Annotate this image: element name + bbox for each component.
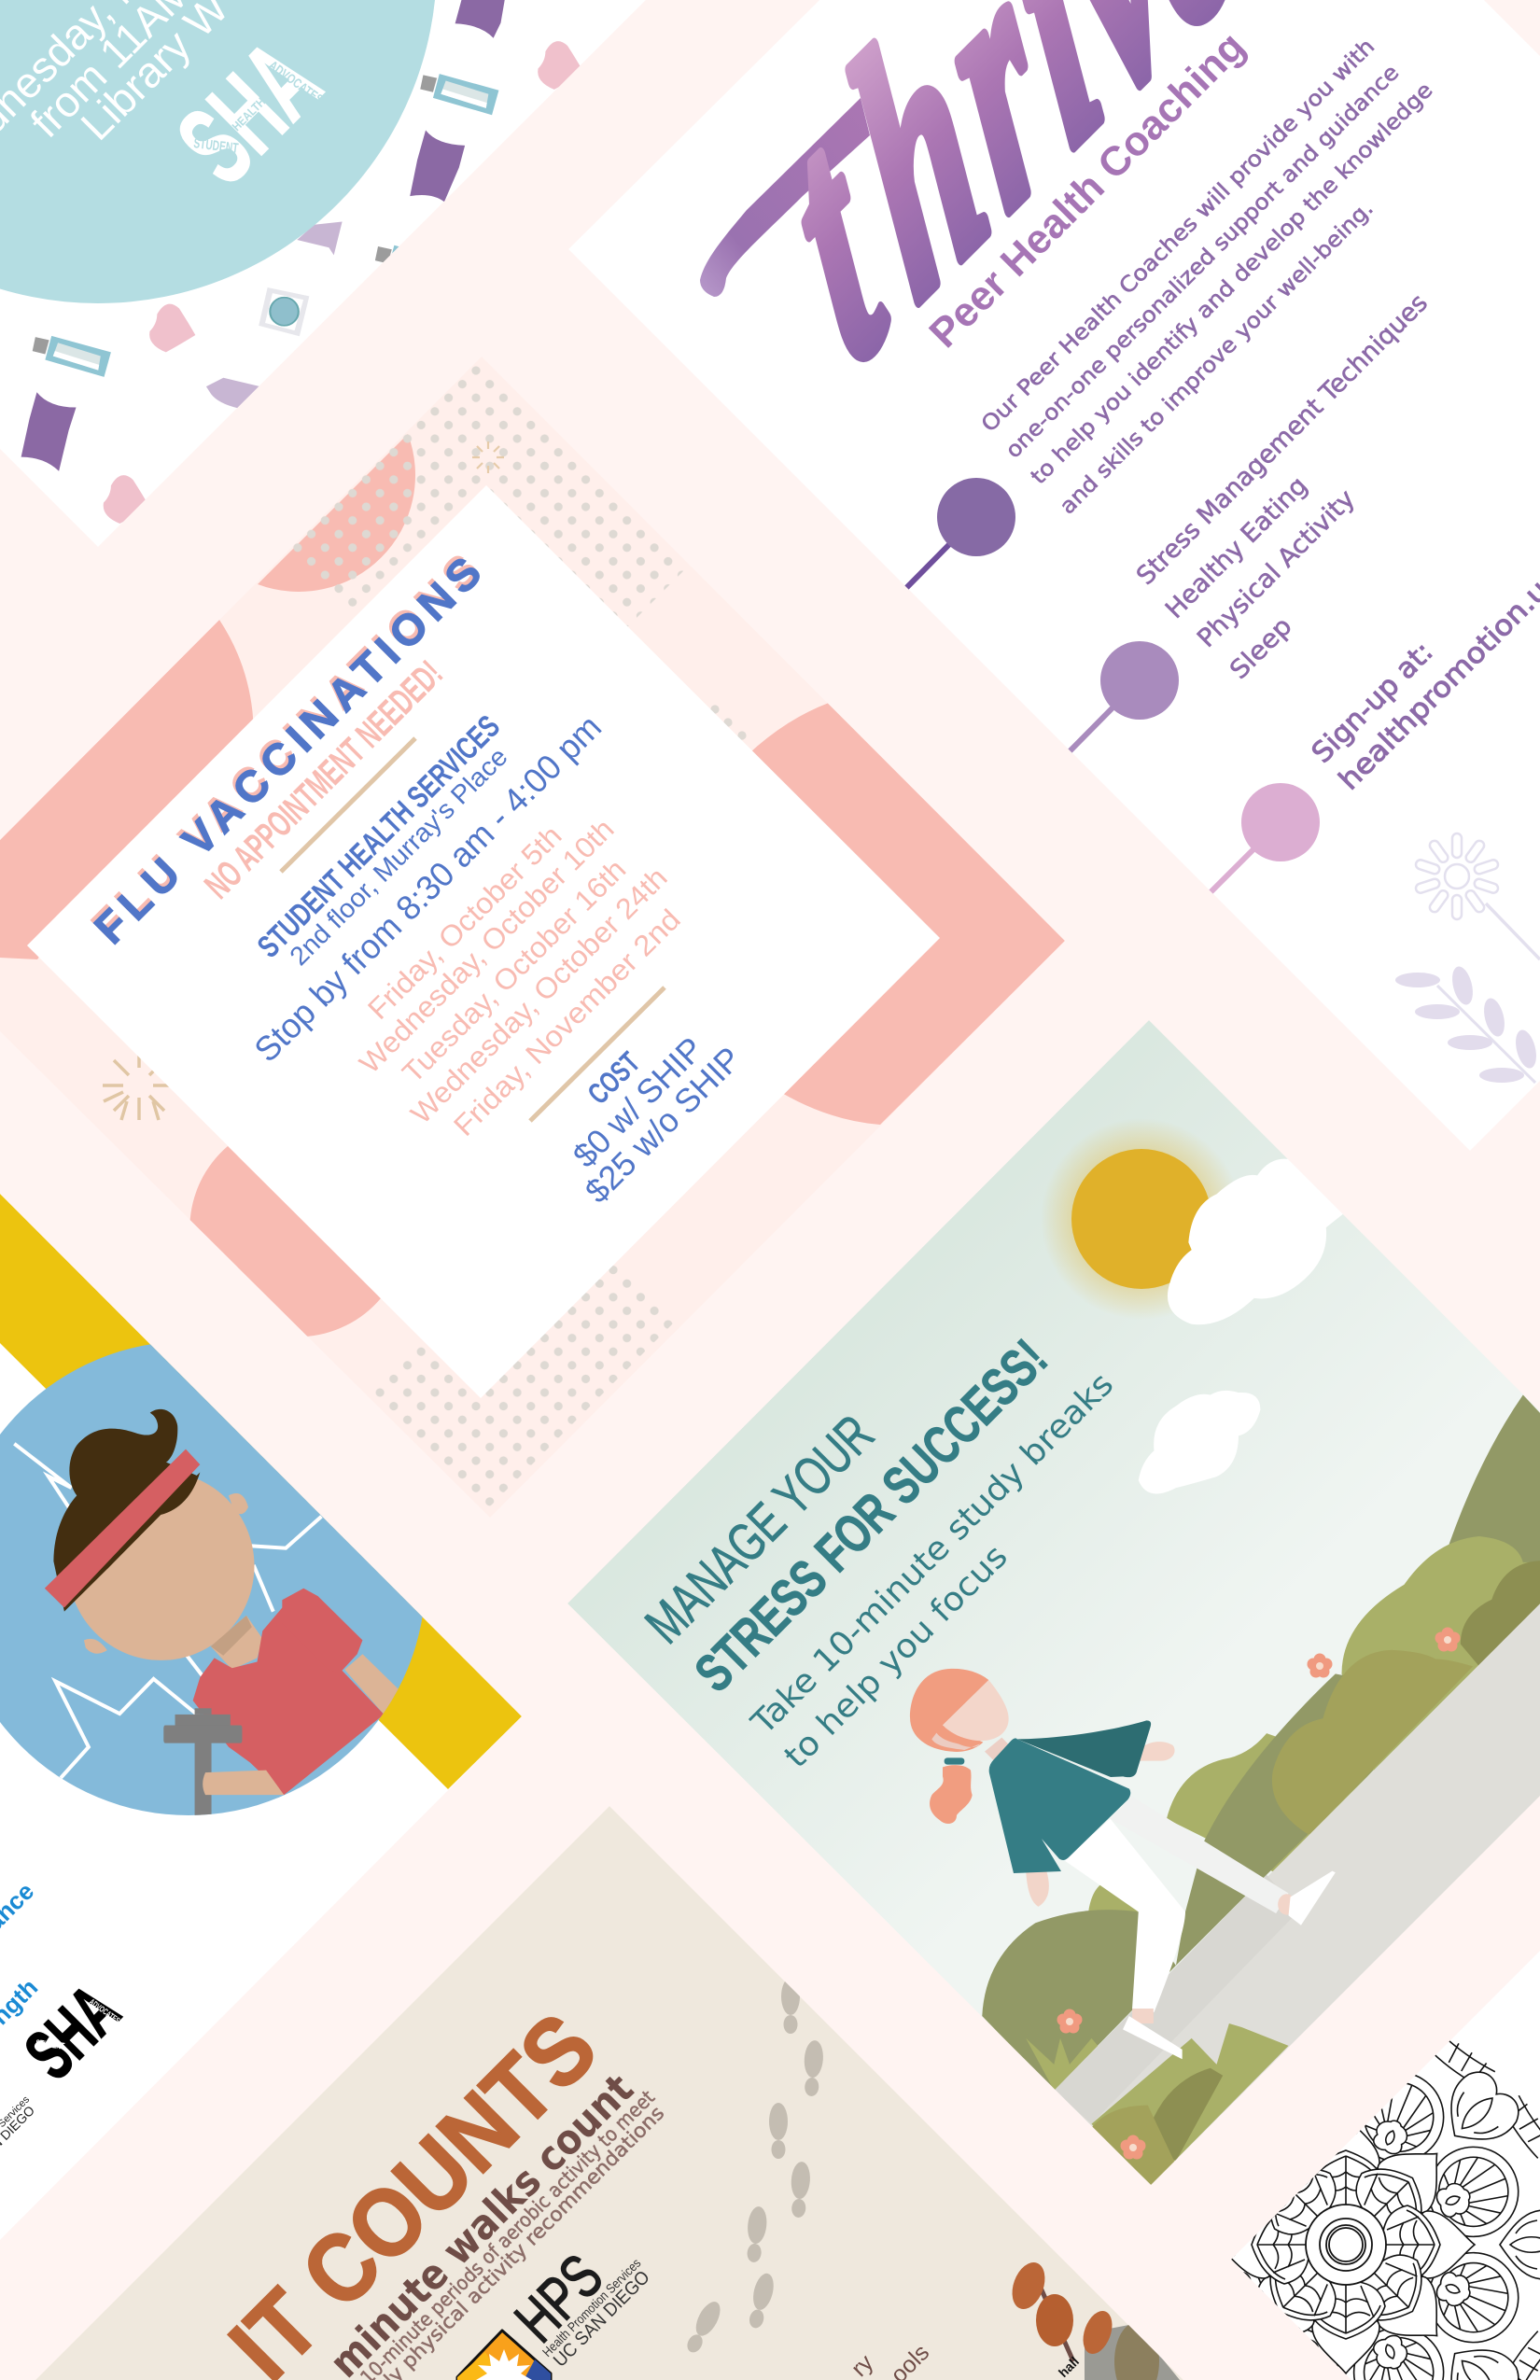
teal event circle (0, 0, 437, 303)
description text: one-on-one personalized support and guidance (1001, 61, 1404, 463)
divider (530, 987, 665, 1121)
logo: health promotion services (457, 2241, 654, 2380)
panel: student health advocates poster (0, 0, 646, 547)
logo: student health advocates white: ADVOCATES (266, 57, 327, 106)
icon: pale leaf branch (1395, 964, 1540, 1083)
trail label: hall (1056, 2354, 1082, 2380)
illustration: landscape (982, 1159, 1540, 2185)
coaching topics list: Healthy Eating (1160, 471, 1313, 624)
no appointment line: NO APPOINTMENT NEEDED! (197, 653, 451, 906)
icon: large sunburst (103, 1056, 169, 1120)
coaching topics list: Physical Activity (1192, 484, 1361, 653)
recommendation text: 10-minute periods of aerobic activity to meet (357, 2086, 659, 2380)
subtitle: Peer Health Coaching (920, 23, 1254, 357)
dates: Friday, November 2nd (447, 903, 687, 1142)
confetti icons: banners, bottles, hearts and condom (21, 0, 583, 524)
logo: student health advocates black: STUDENT (35, 2038, 65, 2052)
peach semicircle bottom (189, 1146, 381, 1337)
logo: student health advocates white (179, 47, 326, 181)
logo: health promotion services: HPS (502, 2241, 615, 2355)
heading with shadow: FLU VACCINATIONS (82, 544, 487, 950)
illustration: walking girl legs (1026, 1797, 1336, 2059)
icon: trees and rock (1006, 2258, 1180, 2380)
panel: thrive peer health coaching poster (568, 0, 1540, 1151)
panel: mandala coloring page (1118, 1951, 1540, 2380)
illustration: walking girl upper body (910, 1669, 1175, 1873)
dates: Tuesday, October 16th (396, 853, 632, 1089)
description text: Our Peer Health Coaches will provide you with (977, 35, 1379, 437)
logo: student health advocates white: STUDENT (193, 135, 239, 157)
cost: $25 w/o SHIP (578, 1040, 749, 1211)
sun glow (1045, 1123, 1230, 1316)
location: STUDENT HEALTH SERVICES (251, 708, 507, 965)
logo: student health advocates black: SHA (9, 1969, 134, 2094)
blue circle (0, 1341, 426, 1815)
dates (353, 813, 687, 1142)
icon: footprints (682, 1978, 824, 2356)
cost: $0 w/ SHIP (566, 1029, 710, 1175)
sun (1071, 1149, 1211, 1289)
benefit labels (0, 1877, 43, 2064)
lollipop bullets (906, 478, 1320, 892)
logo: health promotion services: Health Promotion Services (539, 2255, 644, 2359)
heading with shadow: FLU VACCINATIONS (85, 547, 490, 953)
logo: health promotion services: UC SAN DIEGO (550, 2267, 654, 2372)
logo: student health advocates black (9, 1969, 134, 2094)
icon: small sunburst (472, 441, 504, 473)
description text (977, 35, 1437, 519)
panel: manage stress poster (567, 1020, 1540, 2185)
sign-up text: Sign-up at: (1306, 636, 1439, 770)
coaching topics list: Sleep (1225, 611, 1298, 685)
subheading: minute walks count: minute walks count (321, 2065, 643, 2380)
peach chevron right (728, 703, 1065, 1125)
panel: fitness poster (0, 1194, 522, 2240)
mandala line art (1118, 2017, 1540, 2380)
stray dots (710, 705, 747, 740)
white card (27, 485, 940, 1398)
heading: manage your stress (634, 1328, 1059, 1703)
dot field bottom (375, 1266, 672, 1506)
location: Stop by from 8:30 am - 4:00 pm (247, 707, 609, 1070)
thrive swash (700, 98, 870, 297)
map text fragments (847, 2339, 934, 2380)
icon: pale flower (1415, 833, 1540, 959)
logo: student health advocates black: ADVOCATES (88, 1997, 121, 2025)
description text: and skills to improve your well-being. (1056, 196, 1379, 519)
heading: manage your stress: MANAGE YOUR (634, 1404, 886, 1655)
study break text: Take 10-minute study breaks (744, 1365, 1121, 1743)
icons: orange flowers (1057, 1628, 1460, 2160)
study break text: to help you focus (777, 1538, 1015, 1775)
cost: COST (581, 1045, 647, 1111)
location: 2nd floor, Murray's Place (284, 742, 513, 971)
sign-up text (1312, 582, 1540, 791)
heading: manage your stress: STRESS FOR SUCCESS! (683, 1328, 1059, 1703)
panel: flu vaccinations poster (0, 355, 1065, 1521)
logo: student health advocates white: HEALTH (230, 94, 268, 133)
yellow band (0, 1194, 522, 1789)
coaching topics list: Stress Management Techniques (1131, 288, 1434, 591)
description text: to help you identify and develop the knowledge (1027, 78, 1437, 489)
dates: Wednesday, October 24th (404, 861, 674, 1130)
dates: Friday, October 5th (361, 819, 568, 1026)
divider (281, 738, 415, 872)
peach semicircle top (258, 434, 415, 592)
peach band left (0, 620, 254, 959)
dates: Wednesday, October 10th (353, 813, 621, 1080)
illustration: person lifting dumbbell (14, 1409, 399, 1816)
panel: it counts poster (35, 1806, 1183, 2380)
dot field top (293, 366, 683, 627)
